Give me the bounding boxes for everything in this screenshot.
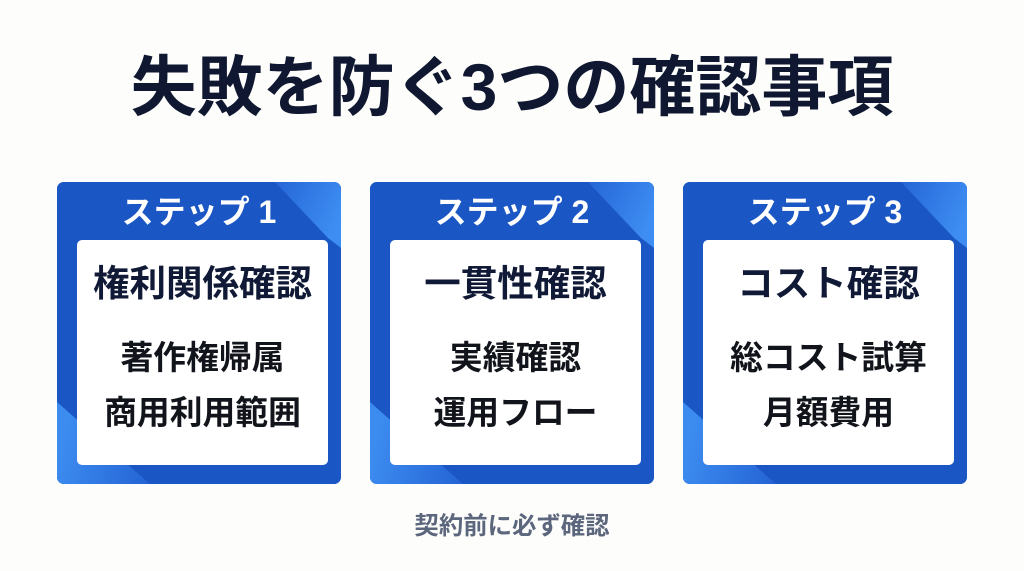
white content box <box>390 240 641 465</box>
white content box <box>703 240 954 465</box>
panel: step 3 <box>683 182 967 484</box>
white content box <box>77 240 328 465</box>
step label: ステップ 1 <box>122 194 276 230</box>
card heading: 権利関係確認 <box>93 263 312 304</box>
item: monthly fee: 月額費用 <box>763 394 894 431</box>
item: operations flow: 運用フロー <box>434 394 597 431</box>
title: 失敗を防ぐ3つの確認事項 <box>131 50 893 124</box>
panel: step 1 <box>57 182 341 484</box>
step label: ステップ 3 <box>748 194 902 230</box>
footer note: 契約前に必ず確認 <box>414 513 610 540</box>
card heading: コスト確認 <box>737 263 920 304</box>
item: commercial use: 商用利用範囲 <box>104 394 301 431</box>
item: track record: 実績確認 <box>450 339 581 376</box>
item: total cost: 総コスト試算 <box>730 339 927 376</box>
card heading: 一貫性確認 <box>424 263 607 304</box>
item: copyright: 著作権帰属 <box>120 339 284 376</box>
step label: ステップ 2 <box>435 194 589 230</box>
panel: step 2 <box>370 182 654 484</box>
